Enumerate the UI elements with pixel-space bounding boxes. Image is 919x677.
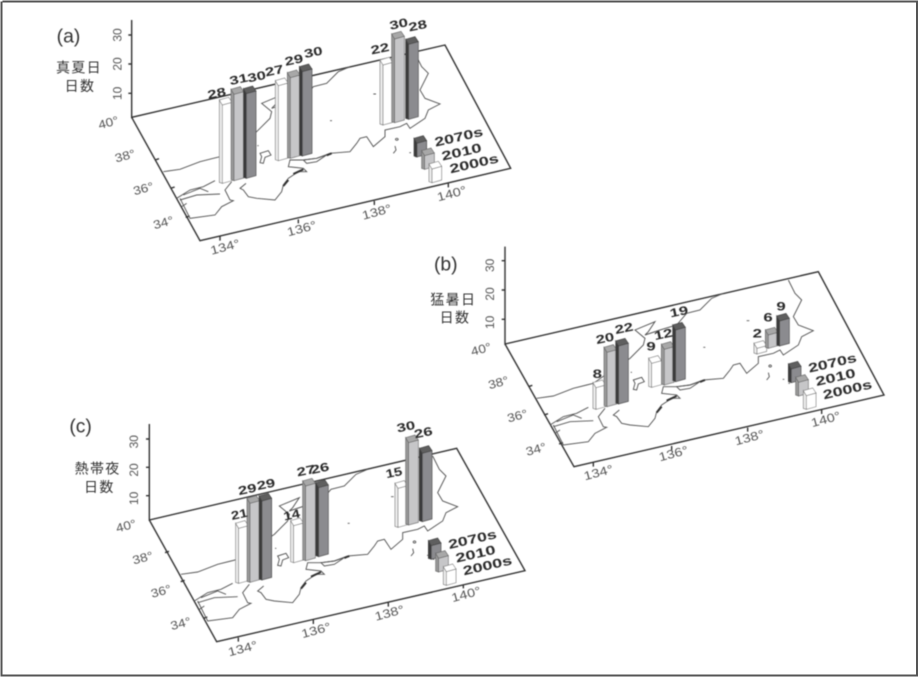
y-axis title b: 日数	[440, 310, 470, 326]
latitude and longitude labels b	[469, 340, 842, 483]
legend b: 2010	[814, 366, 857, 389]
bar values c	[230, 418, 434, 524]
bar values a: 31	[228, 70, 250, 88]
bars b	[593, 313, 789, 409]
latitude and longitude labels a: 138°	[360, 201, 393, 223]
bar values b: 9	[646, 340, 656, 354]
latitude and longitude labels a: 136°	[285, 218, 318, 239]
y-axis numbers b: 20	[483, 287, 497, 301]
bar values c: 27	[295, 462, 317, 479]
y-axis numbers a	[110, 28, 124, 100]
y-axis numbers c: 10	[127, 491, 141, 505]
y-axis numbers c: 20	[127, 463, 141, 477]
map frame c	[146, 424, 525, 642]
latitude and longitude labels c: 136°	[300, 620, 333, 641]
legend c	[428, 527, 513, 585]
y-axis title a	[56, 59, 102, 94]
latitude and longitude labels c: 34°	[169, 614, 193, 633]
latitude and longitude labels b: 140°	[809, 409, 842, 430]
latitude and longitude labels b: 136°	[657, 443, 690, 464]
latitude and longitude labels a: 40°	[97, 113, 120, 132]
bar values b: 22	[613, 319, 635, 337]
bar values a: 30	[246, 68, 268, 85]
bar values a: 29	[283, 51, 305, 69]
legend b: 2000s	[822, 377, 873, 402]
latitude and longitude labels c: 140°	[450, 584, 483, 605]
bar values c: 14	[282, 506, 302, 524]
latitude and longitude labels a: 38°	[113, 146, 137, 165]
latitude and longitude labels b: 134°	[582, 462, 615, 483]
y-axis title b: 猛暑日	[430, 291, 476, 307]
map frame a	[128, 20, 511, 241]
latitude and longitude labels c: 38°	[131, 548, 155, 567]
latitude and longitude labels c: 138°	[373, 602, 406, 624]
panel: (c) 熱帯夜	[69, 416, 525, 659]
y-axis numbers a: 20	[110, 57, 124, 71]
bar values c: 26	[309, 459, 331, 477]
y-axis numbers b: 10	[483, 315, 497, 329]
y-axis title b	[430, 291, 476, 326]
bar values c: 15	[384, 464, 404, 481]
latitude and longitude labels c: 36°	[149, 582, 173, 601]
latitude and longitude labels b: 138°	[733, 427, 766, 448]
bar values a	[206, 15, 429, 102]
latitude and longitude labels b: 38°	[487, 373, 510, 392]
panel label a: (a)	[57, 27, 80, 48]
latitude and longitude labels b: 34°	[524, 440, 548, 459]
map frame b	[502, 247, 884, 467]
bar values b: 8	[593, 367, 602, 381]
y-axis title a: 日数	[65, 78, 95, 94]
y-axis title c: 日数	[84, 479, 115, 495]
bar values c: 29	[255, 475, 277, 493]
coastline b	[537, 280, 813, 445]
bar values a: 22	[369, 40, 391, 57]
latitude and longitude labels c: 40°	[114, 516, 138, 535]
panel label c: (c)	[69, 416, 92, 437]
legend c: 2000s	[462, 553, 513, 578]
latitude and longitude labels c: 134°	[226, 638, 259, 659]
bar values a: 30	[303, 43, 324, 61]
bar values a: 28	[206, 84, 228, 102]
y-axis numbers a: 10	[110, 86, 124, 100]
bar values c: 29	[237, 480, 258, 498]
panel: (b) 猛暑日	[430, 247, 884, 483]
latitude and longitude labels a: 134°	[209, 236, 242, 258]
y-axis numbers c	[127, 435, 141, 505]
bar values a: 27	[264, 62, 285, 79]
panel label b: (b)	[434, 255, 458, 276]
y-axis numbers c: 30	[127, 435, 141, 448]
coastline c	[181, 456, 458, 621]
bar values b: 19	[668, 303, 690, 320]
y-axis title c	[75, 460, 121, 495]
bar values c: 26	[413, 424, 434, 441]
bar values a: 28	[407, 17, 429, 34]
legend b	[788, 351, 873, 409]
bar values b: 6	[763, 311, 773, 325]
legend b: 2070s	[807, 351, 858, 376]
bar values b: 20	[594, 329, 616, 347]
panel: (a) 真夏日	[56, 15, 511, 258]
legend c: 2070s	[447, 527, 498, 552]
bar values c: 30	[395, 418, 417, 435]
latitude and longitude labels a: 36°	[132, 179, 155, 198]
legend a: 2070s	[433, 125, 484, 150]
legend c: 2010	[454, 543, 497, 566]
latitude and longitude labels a	[97, 113, 468, 258]
legend a	[414, 125, 500, 183]
latitude and longitude labels c	[114, 516, 483, 659]
latitude and longitude labels b: 40°	[469, 340, 493, 359]
y-axis title c: 熱帯夜	[75, 460, 121, 476]
legend a: 2010	[440, 141, 483, 164]
bar values b	[593, 300, 786, 381]
latitude and longitude labels a: 34°	[152, 213, 175, 232]
bar values a: 30	[388, 15, 410, 33]
latitude and longitude labels b: 36°	[506, 406, 529, 425]
y-axis numbers b	[483, 258, 497, 329]
bar values b: 2	[753, 326, 762, 340]
coastline a	[163, 53, 440, 218]
bar values b: 12	[653, 325, 674, 343]
latitude and longitude labels a: 140°	[435, 183, 468, 204]
bars c	[236, 435, 432, 583]
y-axis numbers a: 30	[110, 28, 124, 42]
bar values c: 21	[230, 506, 249, 523]
y-axis title a: 真夏日	[56, 59, 102, 75]
bar values b: 9	[776, 300, 786, 314]
y-axis numbers b: 30	[483, 258, 497, 272]
legend a: 2000s	[448, 151, 500, 176]
bars a	[219, 31, 418, 183]
